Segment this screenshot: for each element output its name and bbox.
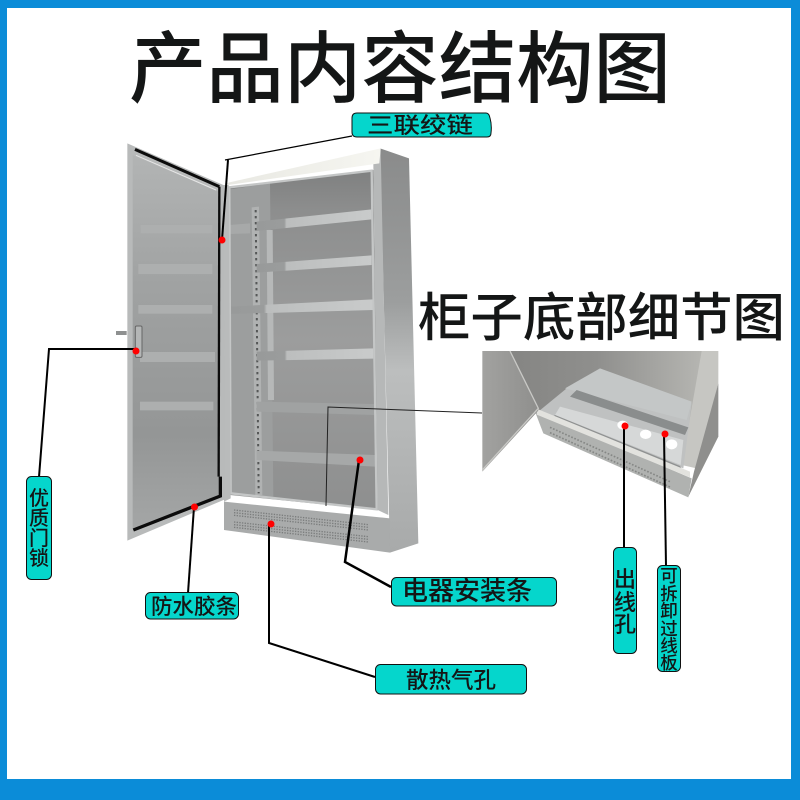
callout: 电器安装条: 电器安装条 — [402, 576, 532, 606]
left jamb — [223, 185, 231, 502]
cabinet bottom detail photo — [482, 351, 718, 497]
cabinet interior back wall — [228, 170, 378, 510]
mounting rail — [252, 207, 274, 495]
callout: 优质门锁: 优 — [29, 487, 49, 510]
callout: 散热气孔 — [268, 520, 526, 694]
callout: 优质门锁: 锁 — [29, 547, 49, 570]
right jamb — [373, 148, 388, 515]
callout: 可拆卸过线板: 拆 — [660, 584, 678, 604]
top band — [225, 148, 381, 185]
subtitle: bottom detail view: 柜子底部细节图 — [418, 290, 785, 348]
callout: 出线孔: 线 — [614, 590, 636, 615]
detail base with vents — [535, 409, 692, 497]
callout: 可拆卸过线板: 可 — [660, 566, 678, 586]
cabinet base with vents — [224, 502, 390, 553]
open door — [127, 143, 225, 541]
callout: 出线孔 — [614, 422, 636, 654]
callout: 散热气孔: 散热气孔 — [406, 668, 496, 693]
mounting bars — [229, 209, 375, 467]
detail right side — [682, 351, 718, 468]
callout: 优质门锁 — [26, 348, 140, 580]
callout: 可拆卸过线板: 过 — [660, 619, 678, 639]
thin leader to detail view — [326, 407, 482, 506]
callout: 出线孔: 孔 — [614, 612, 636, 637]
door handle — [116, 326, 142, 357]
detail open door — [482, 351, 538, 472]
callout: 电器安装条 — [345, 456, 556, 606]
title: 产品内容结构图 — [129, 25, 671, 113]
callout: 可拆卸过线板: 线 — [660, 636, 678, 656]
callout: 优质门锁: 质 — [29, 507, 49, 530]
callout: 防水胶条 — [146, 504, 238, 619]
callout: 防水胶条: 防水胶条 — [151, 595, 237, 619]
callout: 三联绞链: 三联绞链 — [367, 113, 473, 138]
cabinet side panel — [380, 148, 418, 553]
callout: 出线孔: 出 — [614, 567, 636, 592]
callout: 可拆卸过线板: 板 — [660, 653, 678, 673]
detail door edge — [482, 351, 538, 470]
detail back wall — [509, 351, 703, 440]
callout: 三联绞链 — [218, 113, 491, 244]
detail floor rails — [538, 368, 692, 473]
door opening frame — [229, 171, 377, 509]
cabinet photo illustration — [116, 143, 418, 553]
callout: 可拆卸过线板: 卸 — [660, 601, 678, 621]
callout: 可拆卸过线板 — [658, 430, 680, 673]
callout: 优质门锁: 门 — [29, 527, 49, 550]
interior left wall — [229, 183, 273, 497]
